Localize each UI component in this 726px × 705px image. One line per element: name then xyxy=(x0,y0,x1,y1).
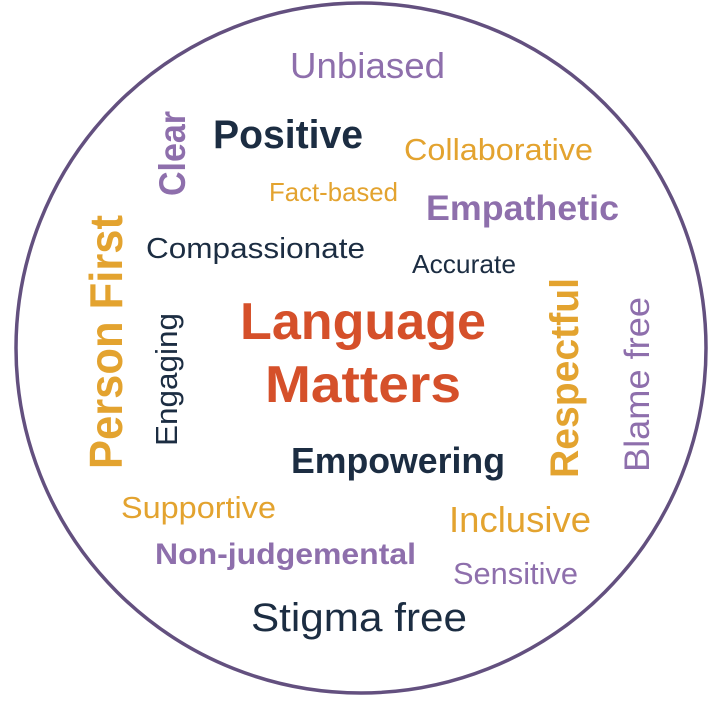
word: Positive: Positive xyxy=(213,113,363,157)
word: Empathetic: Empathetic xyxy=(426,189,619,228)
word: Engaging (rotated): Engaging xyxy=(149,313,184,446)
word: Collaborative: Collaborative xyxy=(404,132,593,167)
title: Language Matters: Language xyxy=(240,293,486,351)
word: Respectful (rotated): Respectful xyxy=(543,278,587,478)
word: Compassionate: Compassionate xyxy=(146,233,365,265)
word: Non-judgemental: Non-judgemental xyxy=(155,538,416,571)
word: Accurate: Accurate xyxy=(412,249,516,279)
word: Sensitive: Sensitive xyxy=(453,556,578,591)
word: Blame free (rotated): Blame free xyxy=(618,297,657,472)
word: Person First (rotated): Person First xyxy=(80,215,132,469)
word: Supportive: Supportive xyxy=(121,490,276,525)
word: Unbiased: Unbiased xyxy=(290,45,445,86)
word: Clear (rotated): Clear xyxy=(152,111,193,196)
title: Language Matters xyxy=(240,293,486,414)
word: Fact-based: Fact-based xyxy=(269,177,398,207)
title: Language Matters: Matters xyxy=(265,356,461,414)
word: Empowering: Empowering xyxy=(291,440,505,481)
word: Stigma free: Stigma free xyxy=(251,596,467,640)
word: Inclusive: Inclusive xyxy=(449,499,591,540)
